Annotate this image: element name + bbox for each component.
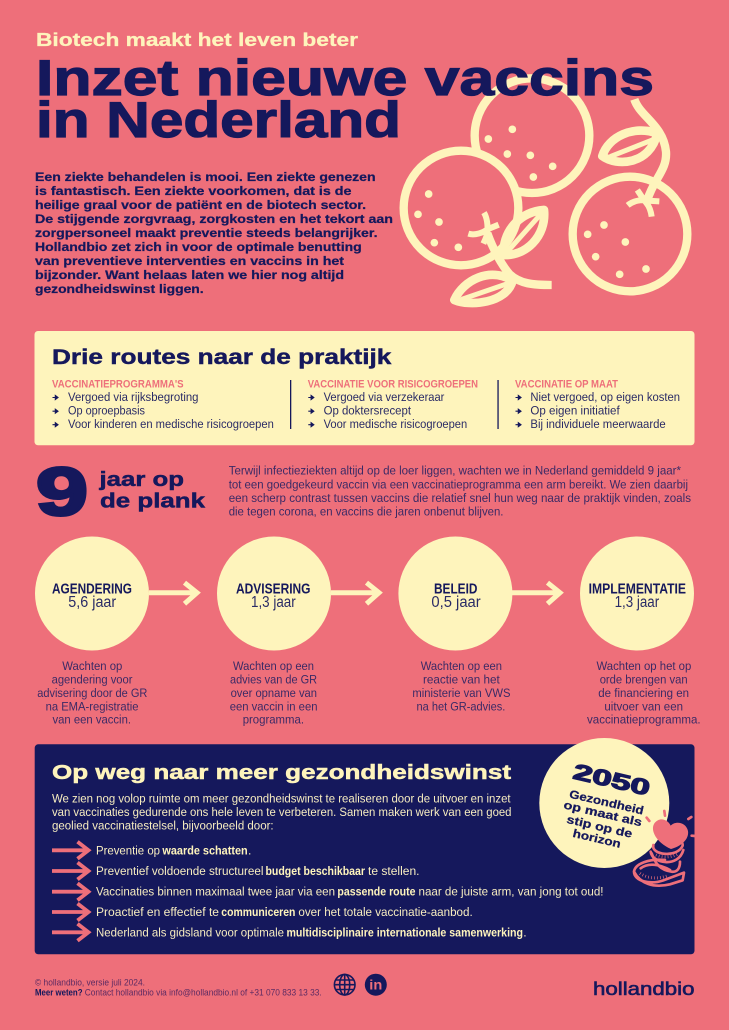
subtitle: Biotech maakt het leven beter — [36, 30, 358, 50]
description: beleid: Wachten op een — [421, 659, 502, 673]
panel: drie routes — [34, 331, 694, 445]
heading: drie routes: Drie routes naar de praktijk — [52, 345, 391, 369]
list item 4 — [96, 905, 473, 919]
description: advisering: over opname van — [231, 686, 317, 700]
step: agendering: 5,6 jaar — [68, 594, 116, 611]
icon: linkedin — [365, 974, 387, 996]
list item 3: naar de juiste arm, van jong tot oud! — [418, 885, 604, 899]
intro text block: heilige graal voor de patiënt en de biotech sector. — [35, 198, 366, 212]
description: implementatie: orde brengen van — [600, 673, 688, 687]
step: advisering: 1,3 jaar — [251, 594, 296, 611]
description: implementatie — [587, 659, 701, 727]
route 1: Voor kinderen en medische risicogroepen — [68, 417, 274, 431]
step: agendering — [35, 536, 149, 650]
list item 5: multidisciplinaire internationale samenwerking — [286, 925, 523, 939]
description: beleid — [412, 659, 510, 713]
description: agendering: van een vaccin. — [52, 713, 131, 727]
description: advisering — [230, 659, 318, 727]
footer text: Contact hollandbio via info@hollandbio.nl of +31 070 833 13 33. — [85, 988, 322, 998]
description: advisering: Wachten op een — [233, 659, 314, 673]
list item 3: passende route — [337, 885, 416, 899]
badge text: op maat als — [562, 800, 643, 829]
intro text block: zorgpersoneel maakt preventie steeds belangrijker. — [35, 226, 378, 240]
step: beleid — [398, 536, 512, 650]
step: implementatie — [580, 536, 694, 650]
description: implementatie: vaccinatieprogramma. — [587, 713, 701, 727]
footer text: Meer weten? — [35, 988, 82, 998]
description: agendering: na EMA-registratie — [46, 699, 139, 713]
arrow — [149, 583, 197, 604]
intro text block: bijzonder. Want helaas laten we hier nog altijd — [35, 268, 344, 282]
illustration: three fruits with leaves — [404, 78, 687, 303]
route 2: Vergoed via verzekeraar — [324, 390, 444, 404]
list item 4: communiceren — [221, 905, 295, 919]
step: agendering: AGENDERING — [52, 581, 132, 597]
description: beleid: reactie van het — [423, 673, 500, 687]
step: beleid: BELEID — [434, 581, 477, 597]
icon: heart with measuring tape — [634, 811, 695, 886]
text block: wachttijd — [229, 464, 691, 518]
description: beleid: na het GR-advies. — [416, 699, 505, 713]
intro paragraph — [52, 792, 512, 833]
list item 1: Preventie op — [96, 843, 160, 857]
route 1 — [52, 378, 274, 431]
list item 4: over het totale vaccinatie-aanbod. — [298, 905, 473, 919]
step: advisering: ADVISERING — [236, 581, 310, 597]
description: agendering: advisering door de GR — [37, 686, 148, 700]
list item 3 — [96, 885, 604, 899]
text block: wachttijd: een scherp contrast tussen vaccins die relatief snel hun weg naar de praktijk vinden, zoals — [229, 491, 691, 505]
heading: gezondheidswinst: Op weg naar meer gezondheidswinst — [52, 762, 511, 784]
step: beleid: 0,5 jaar — [431, 594, 481, 611]
step: implementatie: 1,3 jaar — [615, 594, 659, 611]
step: advisering — [217, 536, 331, 650]
route 3 — [515, 378, 680, 431]
step: implementatie: IMPLEMENTATIE — [589, 581, 686, 597]
title: Inzet nieuwe vaccins — [36, 50, 654, 106]
text block: wachttijd: die tegen corona, en vaccins die jaren onbenut blijven. — [229, 504, 503, 518]
text block: wachttijd: Terwijl infectieziekten altijd op de loer liggen, wachten we in Nederland gemiddeld 9 jaar* — [229, 464, 681, 478]
list item 1: waarde schatten — [162, 843, 248, 857]
list item 2: Preventief voldoende structureel — [96, 864, 264, 878]
year: 2050 — [571, 759, 652, 801]
intro text block: De stijgende zorgvraag, zorgkosten en het tekort aan — [35, 212, 393, 226]
list item 1: . — [248, 843, 251, 857]
description: beleid: ministerie van VWS — [412, 686, 510, 700]
route 1: Vergoed via rijksbegroting — [68, 390, 198, 404]
description: advisering: programma. — [243, 713, 304, 727]
route 2: VACCINATIE VOOR RISICOGROEPEN — [308, 378, 478, 390]
list item 5: . — [523, 925, 527, 939]
panel: gezondheidswinst — [35, 744, 694, 954]
intro text block: Een ziekte behandelen is mooi. Een ziekte genezen — [35, 170, 376, 184]
big number 9: 9 — [36, 454, 88, 530]
badge text: horizon — [571, 828, 622, 851]
intro paragraph: geolied vaccinatiestelsel, bijvoorbeeld door: — [52, 819, 274, 833]
description: implementatie: uitvoer van een — [604, 699, 683, 713]
route 3: Op eigen initiatief — [530, 404, 620, 418]
description: advisering: advies van de GR — [230, 673, 317, 687]
badge text: stip op de — [565, 814, 633, 841]
intro paragraph: van vaccinaties gedurende ons hele leven te verbeteren. Samen maken werk van een goed — [52, 805, 512, 819]
arrow — [331, 583, 379, 604]
intro text block: gezondheidswinst liggen. — [35, 282, 204, 296]
icon: globe — [334, 974, 355, 995]
footer text: © hollandbio, versie juli 2024. — [35, 978, 145, 988]
heading: jaar op de plank — [98, 468, 206, 513]
list item 5: Nederland als gidsland voor optimale — [96, 925, 284, 939]
arrow — [512, 583, 560, 604]
title: in Nederland — [36, 92, 401, 148]
list item 2 — [96, 864, 420, 878]
description: agendering: agendering voor — [52, 673, 132, 687]
heading: jaar op de plank: de plank — [100, 490, 206, 513]
route 2 — [308, 378, 478, 431]
footer text — [35, 978, 322, 998]
intro text block: Hollandbio zet zich in voor de optimale benutting — [35, 240, 362, 254]
badge text — [562, 789, 645, 851]
list item 1 — [96, 843, 251, 857]
route 3: Niet vergoed, op eigen kosten — [530, 390, 680, 404]
intro paragraph: We zien nog volop ruimte om meer gezondheidswinst te realiseren door de uitvoer en inzet — [52, 792, 511, 806]
title — [36, 50, 654, 148]
route 1: Op oproepbasis — [68, 404, 145, 418]
logo: hollandbio: hollandbio — [593, 979, 694, 999]
icon: linkedin: in — [369, 978, 382, 993]
description: implementatie: Wachten op het op — [596, 659, 692, 673]
text block: wachttijd: tot een goedgekeurd vaccin via een vaccinatieprogramma een arm bereikt. We zien daarbij — [229, 477, 688, 491]
route 3: VACCINATIE OP MAAT — [515, 378, 618, 390]
description: agendering — [37, 659, 148, 727]
intro text block: van preventieve interventies en vaccins in het — [35, 254, 344, 268]
description: advisering: een vaccin in een — [230, 699, 318, 713]
intro text block: is fantastisch. Een ziekte voorkomen, dat is de — [35, 184, 352, 198]
description: agendering: Wachten op — [62, 659, 122, 673]
list item 2: budget beschikbaar — [266, 864, 365, 878]
badge: 2050 — [539, 738, 669, 868]
badge text: Gezondheid — [568, 789, 645, 817]
heading: jaar op de plank: jaar op — [98, 468, 184, 491]
intro text block — [35, 170, 393, 296]
list item 2: te stellen. — [368, 864, 420, 878]
list item 3: Vaccinaties binnen maximaal twee jaar via een — [96, 885, 335, 899]
route 1: VACCINATIEPROGRAMMA'S — [52, 378, 184, 390]
description: implementatie: de financiering en — [598, 686, 689, 700]
route 3: Bij individuele meerwaarde — [530, 417, 666, 431]
list item 4: Proactief en effectief te — [96, 905, 219, 919]
arrows list — [52, 842, 88, 941]
list item 5 — [96, 925, 527, 939]
route 2: Voor medische risicogroepen — [324, 417, 467, 431]
route 2: Op doktersrecept — [324, 404, 412, 418]
